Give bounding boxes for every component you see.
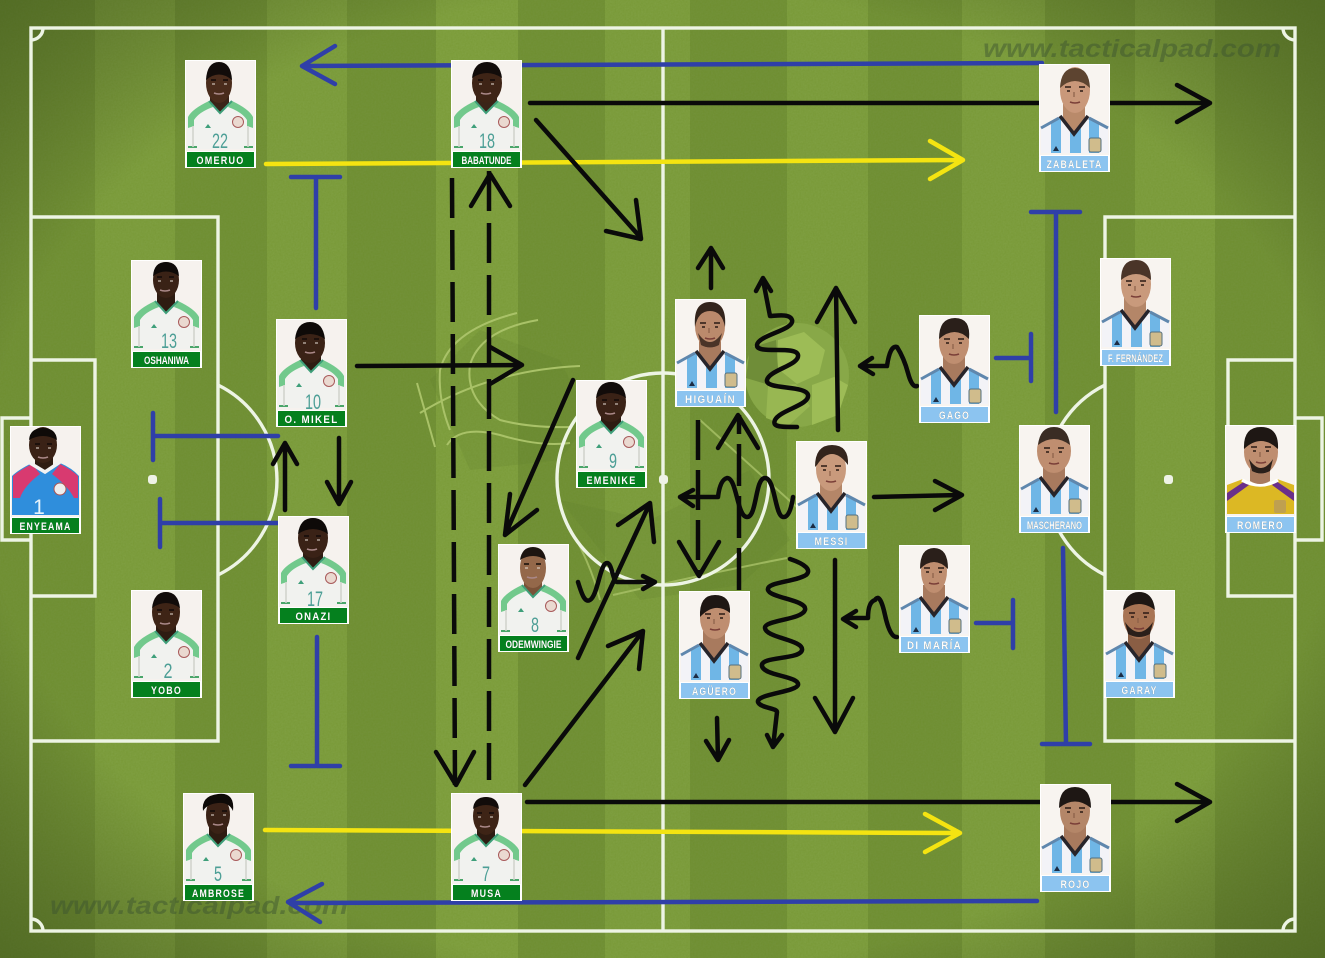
blue block: Onazi bottom bbox=[291, 637, 340, 766]
dashed arrow: Aguero up bbox=[718, 415, 758, 590]
watermark top right: www.tacticalpad.com bbox=[983, 35, 1281, 63]
blue block: Gago bbox=[996, 334, 1031, 381]
player card: Romero: ROMERO bbox=[1237, 520, 1284, 532]
arrow: Messi down bbox=[815, 560, 853, 732]
player card: Enyeama: 1 bbox=[33, 496, 45, 519]
arrow: Odemwingie to centre bbox=[578, 503, 654, 658]
player card: Musa: MUSA bbox=[471, 888, 502, 900]
faint football emblem bbox=[745, 323, 849, 427]
player card: Garay: GARAY bbox=[1122, 685, 1158, 697]
player card: Zabaleta: ZABALETA bbox=[1046, 159, 1102, 171]
player card: O. Mikel: O. MIKEL bbox=[284, 414, 338, 426]
player card: Musa: 7 bbox=[482, 863, 490, 886]
player card: Onazi: ONAZI bbox=[296, 611, 332, 623]
player card: Yobo: 2 bbox=[164, 660, 172, 683]
blue arrow: Rojo back over Ambrose bbox=[288, 884, 1037, 922]
arrow: Messi right bbox=[874, 481, 962, 510]
player card: Onazi: 17 bbox=[307, 588, 323, 611]
squiggle arrow: Messi bbox=[680, 478, 793, 517]
player card: Enyeama bbox=[10, 426, 81, 534]
arrow: Messi up bbox=[817, 288, 855, 430]
arrow: Aguero down bbox=[706, 718, 729, 760]
player card: Enyeama: ENYEAMA bbox=[20, 521, 72, 533]
dashed arrow: Higuain down bbox=[679, 420, 719, 576]
blue block: Mikel left bbox=[153, 413, 278, 460]
arrow: Onazi up to Mikel bbox=[273, 443, 297, 510]
player card: Oshaniwa: 13 bbox=[161, 330, 177, 353]
player card: Higuain: HIGUAÍN bbox=[685, 393, 736, 406]
arrow: Emenike drop bbox=[505, 380, 573, 535]
yellow arrow: top flank bbox=[266, 141, 963, 179]
player card: O. Mikel: 10 bbox=[305, 391, 321, 414]
black arrow: Musa up the wing bbox=[527, 784, 1210, 821]
dashed arrow: down the left channel bbox=[436, 178, 474, 785]
player card: Omeruo: 22 bbox=[212, 130, 228, 153]
player card: O. Mikel bbox=[276, 319, 347, 427]
arrow: Musa to centre bbox=[525, 631, 643, 785]
player card: Oshaniwa: OSHANIWA bbox=[144, 355, 189, 367]
player card: Gago bbox=[919, 315, 990, 423]
black arrow: Babatunde up the wing bbox=[530, 85, 1210, 122]
player card: Emenike bbox=[576, 380, 647, 488]
player card: Omeruo: OMERUO bbox=[196, 155, 244, 167]
player card: Yobo: YOBO bbox=[151, 685, 182, 697]
player card: Aguero: AGÜERO bbox=[692, 685, 737, 698]
squiggle arrow: Di Maria bbox=[843, 598, 897, 637]
player card: Ambrose bbox=[183, 793, 254, 901]
player card: Emenike: EMENIKE bbox=[586, 475, 636, 487]
watermark bottom left: www.tacticalpad.com bbox=[50, 892, 348, 920]
player card: Babatunde: 18 bbox=[479, 130, 495, 153]
player card: Babatunde: BABATUNDE bbox=[462, 155, 512, 167]
player card: Di Maria bbox=[899, 545, 970, 653]
player card: Mascherano bbox=[1019, 425, 1090, 533]
blue block: Mikel top bbox=[291, 177, 340, 308]
blue block: Onazi left bbox=[160, 499, 278, 547]
squiggle arrow: Higuain dribble bbox=[756, 278, 808, 427]
player card: Gago: GAGO bbox=[939, 410, 970, 422]
faint trophy emblem bbox=[417, 313, 800, 600]
player card: Rojo: ROJO bbox=[1060, 879, 1090, 891]
player card: Onazi bbox=[278, 516, 349, 624]
blue block: Di Maria bbox=[976, 600, 1013, 648]
player card: Odemwingie bbox=[498, 544, 569, 652]
player card: Yobo bbox=[131, 590, 202, 698]
dashed arrow: up the left channel bbox=[471, 171, 510, 780]
squiggle arrow: Odemwingie run bbox=[578, 563, 655, 601]
player card: Emenike: 9 bbox=[609, 450, 617, 473]
black arrow: Mikel forward bbox=[357, 347, 522, 384]
player card: Messi: MESSI bbox=[814, 536, 848, 548]
blue block: Mascherano top bbox=[1031, 212, 1080, 412]
player card: Higuain bbox=[675, 299, 746, 407]
player card: Odemwingie: ODEMWINGIE bbox=[506, 639, 562, 651]
yellow arrow: bottom flank bbox=[265, 814, 960, 852]
blue block: Mascherano bottom bbox=[1042, 548, 1090, 744]
arrow: Mikel down to Onazi bbox=[327, 438, 351, 504]
player card: Zabaleta bbox=[1039, 64, 1110, 172]
player card: Di Maria: DI MARÍA bbox=[907, 639, 962, 652]
arrow: Higuain up bbox=[698, 248, 723, 288]
black arrow: Babatunde to centre bbox=[536, 120, 641, 239]
player card: Romero bbox=[1225, 425, 1296, 533]
squiggle arrow: Aguero dribble bbox=[758, 559, 808, 747]
player card: Messi bbox=[796, 441, 867, 549]
player card: Babatunde bbox=[451, 60, 522, 168]
squiggle arrow: Gago bbox=[860, 347, 917, 386]
player card: Oshaniwa bbox=[131, 260, 202, 368]
blue arrow: Zabaleta back over Omeruo bbox=[302, 46, 1042, 84]
player card: F. Fernandez bbox=[1100, 258, 1171, 366]
player card: Omeruo bbox=[185, 60, 256, 168]
player card: Mascherano: MASCHERANO bbox=[1027, 520, 1082, 532]
player card: Ambrose: AMBROSE bbox=[192, 888, 245, 900]
player card: Odemwingie: 8 bbox=[531, 614, 539, 637]
player card: Musa bbox=[451, 793, 522, 901]
player card: Rojo bbox=[1040, 784, 1111, 892]
player card: F. Fernandez: F. FERNÁNDEZ bbox=[1108, 352, 1163, 365]
player card: Garay bbox=[1104, 590, 1175, 698]
player card: Ambrose: 5 bbox=[214, 863, 222, 886]
player card: Aguero bbox=[679, 591, 750, 699]
